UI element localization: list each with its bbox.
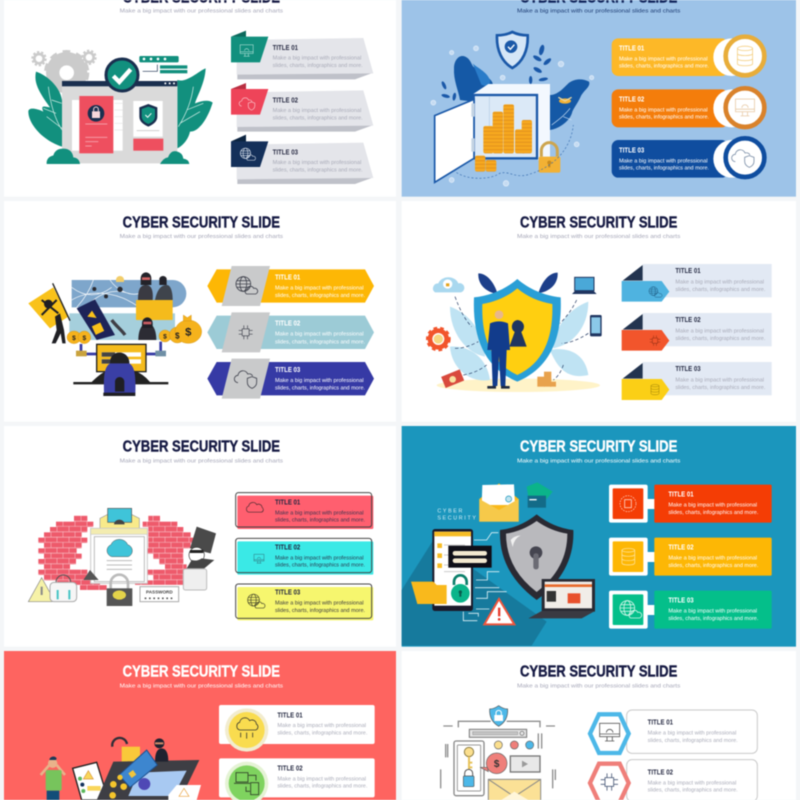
hacker lower bbox=[138, 317, 156, 340]
crack / wrench bbox=[83, 570, 99, 580]
shield bbox=[474, 279, 561, 382]
icon: laptop bbox=[572, 277, 597, 294]
open lock bbox=[112, 738, 140, 763]
card 2: slides, charts, infographics and more. bbox=[619, 115, 709, 121]
card 1: Make a big impact with professional bbox=[668, 503, 757, 509]
card prop bbox=[183, 569, 207, 590]
card 1 bbox=[622, 264, 772, 302]
user badge bbox=[138, 778, 150, 790]
card 1 bbox=[609, 485, 772, 523]
folder bbox=[136, 300, 173, 320]
card 1: Make a big impact with professional bbox=[648, 731, 736, 737]
card 3: slides, charts, infographics and more. bbox=[668, 616, 758, 622]
padlock bbox=[451, 575, 470, 603]
coins bbox=[537, 372, 556, 387]
card 3 bbox=[231, 135, 373, 184]
subtitle: Make a big impact with our professional slides and charts bbox=[517, 683, 681, 689]
coins bbox=[109, 775, 127, 799]
panel: slide 7 coral bbox=[4, 651, 396, 800]
dollar signs bbox=[72, 327, 192, 342]
coin stacks bbox=[475, 104, 532, 172]
panel background bbox=[4, 0, 396, 197]
money bags bbox=[67, 315, 202, 344]
safe door bbox=[435, 99, 475, 182]
card 1: TITLE 01 bbox=[275, 499, 300, 506]
warning triangle bbox=[484, 599, 514, 624]
title: CYBER SECURITY SLIDE bbox=[520, 214, 677, 231]
icon: key bbox=[464, 747, 474, 769]
panel background bbox=[402, 201, 796, 422]
card 2 bbox=[622, 313, 772, 351]
card 3: TITLE 03 bbox=[275, 367, 300, 374]
card 2: slides, charts, infographics and more. bbox=[675, 336, 765, 342]
card 3: Make a big impact with professional bbox=[275, 378, 364, 384]
ground ellipse bbox=[437, 379, 600, 392]
left leaves bbox=[28, 72, 62, 147]
icon: padlock bbox=[539, 143, 560, 173]
phone bbox=[454, 741, 484, 796]
card 1: TITLE 01 bbox=[619, 46, 644, 53]
dollar signs: $ bbox=[72, 335, 76, 342]
card 1: TITLE 01 bbox=[668, 491, 694, 498]
spiders bbox=[92, 287, 123, 298]
card 1: TITLE 01 bbox=[277, 712, 303, 719]
card 3: slides, charts, infographics and more. bbox=[273, 167, 363, 173]
card 2: Make a big impact with professional bbox=[675, 329, 764, 335]
card 2: slides, charts, infographics and more. bbox=[273, 115, 363, 121]
card 3: slides, charts, infographics and more. bbox=[275, 386, 365, 392]
hooded figure bbox=[103, 353, 135, 396]
web band bbox=[72, 280, 186, 307]
pale leaves bbox=[450, 302, 588, 381]
status dots bbox=[494, 741, 534, 749]
card 3: TITLE 03 bbox=[668, 597, 694, 604]
right leaves bbox=[177, 68, 213, 148]
subtitle: Make a big impact with our professional slides and charts bbox=[120, 9, 283, 15]
password box bbox=[448, 546, 492, 568]
dollar signs: $ bbox=[175, 331, 180, 340]
card 2: TITLE 02 bbox=[273, 97, 298, 104]
flag bearer bbox=[52, 313, 66, 343]
browser window bbox=[91, 528, 147, 583]
password bars bbox=[139, 56, 187, 73]
connectors bbox=[81, 342, 161, 354]
card 1 bbox=[590, 710, 757, 753]
title: CYBER SECURITY SLIDE bbox=[123, 214, 280, 231]
card 3 bbox=[609, 591, 772, 629]
bee emblem bbox=[558, 97, 572, 104]
title: CYBER SECURITY SLIDE bbox=[520, 439, 677, 456]
password field: PASSWORD bbox=[146, 590, 173, 595]
title: CYBER SECURITY SLIDE bbox=[520, 664, 677, 681]
businessman bbox=[487, 310, 510, 389]
panel: slide 4 shield bbox=[402, 201, 796, 422]
card 2: TITLE 02 bbox=[675, 317, 701, 324]
panel background bbox=[4, 201, 396, 422]
sprigs bbox=[455, 297, 588, 380]
hacker in hat bbox=[187, 527, 216, 568]
card 3 bbox=[622, 362, 772, 400]
card 2 bbox=[236, 538, 373, 575]
label text: CYBER bbox=[437, 508, 464, 514]
icon: gears bbox=[32, 51, 96, 93]
card 2 bbox=[609, 538, 772, 576]
card 3: slides, charts, infographics and more. bbox=[675, 385, 765, 391]
illustration: secure laptop bbox=[28, 51, 213, 164]
card 3: TITLE 03 bbox=[675, 366, 701, 373]
card 3: Make a big impact with professional bbox=[619, 159, 708, 165]
card 3: Make a big impact with professional bbox=[675, 378, 764, 384]
card 1: Make a big impact with professional bbox=[619, 56, 708, 62]
card 1: Make a big impact with professional bbox=[275, 510, 364, 516]
card 1: TITLE 01 bbox=[273, 45, 298, 52]
money and card bbox=[527, 482, 553, 508]
card 2: Make a big impact with professional bbox=[275, 555, 364, 561]
card 3: TITLE 03 bbox=[275, 590, 300, 597]
card 1 bbox=[219, 705, 375, 752]
card 1: slides, charts, infographics and more. bbox=[648, 738, 738, 744]
subtitle: Make a big impact with our professional slides and charts bbox=[120, 458, 283, 464]
laptop bbox=[97, 760, 199, 800]
card 1: slides, charts, infographics and more. bbox=[275, 518, 365, 524]
card 2: slides, charts, infographics and more. bbox=[668, 563, 758, 569]
phone alert bbox=[77, 299, 115, 340]
diagonal shadow bbox=[402, 540, 547, 646]
card 1: slides, charts, infographics and more. bbox=[273, 63, 363, 69]
panel background bbox=[4, 426, 396, 647]
phone alert bbox=[73, 762, 108, 800]
panel: slide 8 line art bbox=[402, 651, 796, 800]
card 2: slides, charts, infographics and more. bbox=[648, 788, 738, 794]
card 3 bbox=[207, 359, 374, 399]
card 1: TITLE 01 bbox=[675, 268, 701, 275]
mounds bbox=[47, 149, 189, 164]
laptop window bbox=[62, 81, 177, 163]
card 2: Make a big impact with professional bbox=[668, 556, 757, 562]
padlock bbox=[107, 575, 132, 606]
card 1: slides, charts, infographics and more. bbox=[619, 64, 709, 70]
url bar bbox=[469, 729, 527, 737]
title: CYBER SECURITY SLIDE bbox=[123, 439, 280, 456]
card 2: Make a big impact with professional bbox=[619, 108, 708, 114]
safe body bbox=[473, 84, 550, 160]
card 1: Make a big impact with professional bbox=[675, 280, 764, 286]
card 2 bbox=[590, 760, 757, 800]
envelope bbox=[488, 779, 541, 800]
shield document bbox=[133, 101, 163, 151]
illustration: shield devices bbox=[411, 482, 595, 624]
card 2: Make a big impact with professional bbox=[273, 108, 361, 114]
icon: shield check bbox=[497, 32, 528, 68]
keyhole bbox=[509, 320, 527, 347]
panel: slide 5 brick wall bbox=[4, 426, 396, 647]
credit card bbox=[119, 750, 157, 787]
subtitle: Make a big impact with our professional slides and charts bbox=[120, 234, 283, 240]
card 3: TITLE 03 bbox=[619, 148, 644, 155]
dotted path bbox=[453, 125, 573, 178]
lower band bbox=[69, 313, 175, 340]
hacking screen bbox=[97, 344, 146, 372]
card 1: Make a big impact with professional bbox=[273, 56, 361, 62]
dollar signs: $ bbox=[163, 334, 167, 341]
folder bbox=[411, 582, 447, 604]
card 2: TITLE 02 bbox=[619, 97, 644, 104]
card 2 bbox=[219, 758, 375, 800]
card 2: Make a big impact with professional bbox=[275, 332, 364, 338]
illustration: firewall bbox=[28, 508, 216, 606]
card 1: TITLE 01 bbox=[275, 274, 300, 281]
desk bbox=[73, 370, 168, 384]
briefcase bbox=[50, 575, 77, 602]
dollar signs: $ bbox=[82, 335, 86, 342]
panel background bbox=[402, 426, 796, 647]
icon: gear bbox=[427, 328, 449, 350]
card 3 bbox=[236, 584, 373, 620]
card 1 bbox=[612, 37, 764, 76]
connector boxes bbox=[76, 351, 166, 356]
dollar bubble: $ bbox=[494, 759, 500, 770]
card 3: Make a big impact with professional bbox=[668, 609, 757, 615]
password field bbox=[140, 587, 179, 602]
card 3: Make a big impact with professional bbox=[273, 160, 361, 166]
label text: SECURITY bbox=[437, 515, 478, 521]
icon: shield lock bbox=[490, 706, 508, 726]
card 2: TITLE 02 bbox=[668, 544, 694, 551]
warning envelope bbox=[168, 785, 201, 800]
icon: banknote bbox=[441, 369, 464, 388]
card 1: slides, charts, infographics and more. bbox=[675, 287, 765, 293]
connector lines bbox=[463, 533, 507, 621]
card 3: slides, charts, infographics and more. bbox=[619, 166, 709, 172]
dollar signs: $ bbox=[185, 327, 192, 339]
screen bbox=[128, 771, 187, 796]
card 1: Make a big impact with professional bbox=[277, 723, 366, 729]
card 2: TITLE 02 bbox=[275, 321, 300, 328]
title: CYBER SECURITY SLIDE bbox=[123, 664, 280, 681]
illustration: card theft bbox=[41, 738, 201, 800]
card 2: TITLE 02 bbox=[277, 765, 303, 772]
card 1: Make a big impact with professional bbox=[275, 285, 364, 291]
illustration: line art security bbox=[441, 706, 555, 800]
illustration: safe with coins bbox=[431, 32, 594, 186]
card 2: slides, charts, infographics and more. bbox=[275, 563, 365, 569]
subtitle: Make a big impact with our professional slides and charts bbox=[120, 683, 283, 689]
card 2: Make a big impact with professional bbox=[277, 776, 366, 782]
big shield bbox=[500, 514, 573, 600]
floating dots bbox=[431, 46, 594, 186]
card 2: slides, charts, infographics and more. bbox=[275, 339, 365, 345]
card 2 bbox=[231, 83, 373, 132]
illustration: shield and man bbox=[427, 273, 602, 392]
card 1: TITLE 01 bbox=[648, 720, 673, 727]
video player bbox=[510, 756, 540, 772]
navy feather leaves bbox=[478, 273, 558, 294]
red document with lock bbox=[72, 96, 123, 153]
envelope bbox=[479, 483, 519, 522]
warning triangle bbox=[28, 578, 55, 602]
card 3: TITLE 03 bbox=[273, 149, 298, 156]
card 1: slides, charts, infographics and more. bbox=[275, 293, 365, 299]
hacker bbox=[154, 738, 168, 762]
brick wall bbox=[38, 516, 197, 590]
hacker pair bbox=[138, 272, 173, 300]
card 2: Make a big impact with professional bbox=[648, 780, 736, 786]
leaf sprigs bbox=[441, 44, 552, 101]
phone bbox=[432, 529, 473, 611]
flag bbox=[28, 283, 70, 328]
card 3: Make a big impact with professional bbox=[275, 601, 364, 607]
subtitle: Make a big impact with our professional slides and charts bbox=[517, 9, 681, 15]
card 1 bbox=[207, 266, 374, 306]
icon: phone bbox=[590, 315, 602, 336]
bracket lines bbox=[441, 721, 555, 788]
blue leaves bbox=[454, 56, 589, 130]
card 2: TITLE 02 bbox=[648, 770, 673, 777]
wrench bbox=[112, 320, 125, 335]
card 1 bbox=[231, 31, 373, 79]
illustration: hackers bbox=[28, 272, 202, 396]
panel background bbox=[4, 651, 396, 800]
icon: cloud lock bbox=[433, 277, 464, 292]
panel background bbox=[402, 0, 796, 197]
worried person bbox=[41, 756, 65, 800]
panel: slide 6 dark teal shield bbox=[402, 426, 796, 647]
laptop bbox=[528, 579, 595, 618]
subtitle: Make a big impact with our professional slides and charts bbox=[517, 234, 681, 240]
light bulb bbox=[116, 276, 124, 282]
card 3 bbox=[612, 138, 764, 178]
panel: slide 3 hackers bbox=[4, 201, 396, 422]
card 2 bbox=[612, 88, 764, 127]
subtitle: Make a big impact with our professional slides and charts bbox=[517, 458, 681, 464]
panel: slide 2 blue safe bbox=[402, 0, 796, 197]
icon: padlock bbox=[463, 769, 474, 787]
card 1: slides, charts, infographics and more. bbox=[668, 510, 758, 516]
card 1: slides, charts, infographics and more. bbox=[277, 730, 367, 736]
panel: slide 1 teal laptop bbox=[4, 0, 396, 197]
icon: check badge bbox=[106, 59, 138, 91]
card 2 bbox=[207, 312, 374, 352]
card 2: TITLE 02 bbox=[275, 544, 300, 551]
card 1 bbox=[236, 493, 373, 529]
card 3: slides, charts, infographics and more. bbox=[275, 608, 365, 614]
card 2: slides, charts, infographics and more. bbox=[277, 784, 367, 790]
envelope bbox=[100, 508, 139, 528]
label text bbox=[437, 508, 478, 521]
panel background bbox=[402, 651, 796, 800]
